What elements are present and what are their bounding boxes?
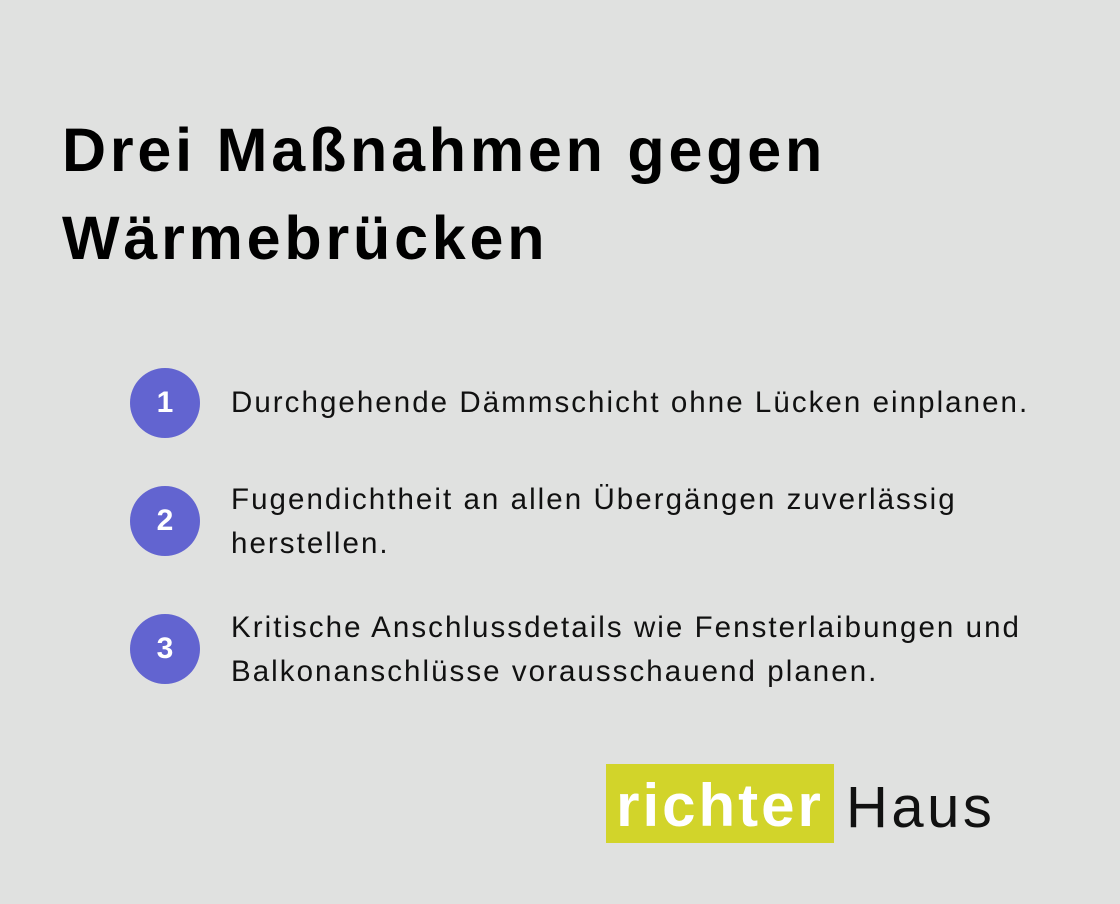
item 3 — [130, 611, 1021, 688]
text 3: Kritische Anschlussdetails wie Fensterlaibungen und — [231, 611, 1021, 644]
badge 3: 3 — [157, 632, 173, 665]
badge 1: 1 — [157, 386, 173, 419]
badge 1 — [130, 368, 200, 438]
badge 2 — [130, 486, 200, 556]
logo — [606, 764, 995, 843]
item 2 — [130, 483, 957, 560]
text 1: Durchgehende Dämmschicht ohne Lücken einplanen. — [231, 386, 1029, 419]
title — [62, 116, 826, 272]
title: Wärmebrücken — [62, 204, 548, 272]
logo box: richter: richter — [616, 772, 824, 839]
text 2: herstellen. — [231, 527, 390, 560]
title: Drei Maßnahmen gegen — [62, 116, 826, 184]
badge 2: 2 — [157, 504, 173, 537]
text 2: Fugendichtheit an allen Übergängen zuverlässig — [231, 483, 957, 516]
text 3 — [231, 611, 1021, 688]
text 2 — [231, 483, 957, 560]
badge 3 — [130, 614, 200, 684]
item 1 — [130, 368, 1029, 438]
logo text: Haus: Haus — [846, 775, 995, 840]
text 3: Balkonanschlüsse vorausschauend planen. — [231, 655, 878, 688]
